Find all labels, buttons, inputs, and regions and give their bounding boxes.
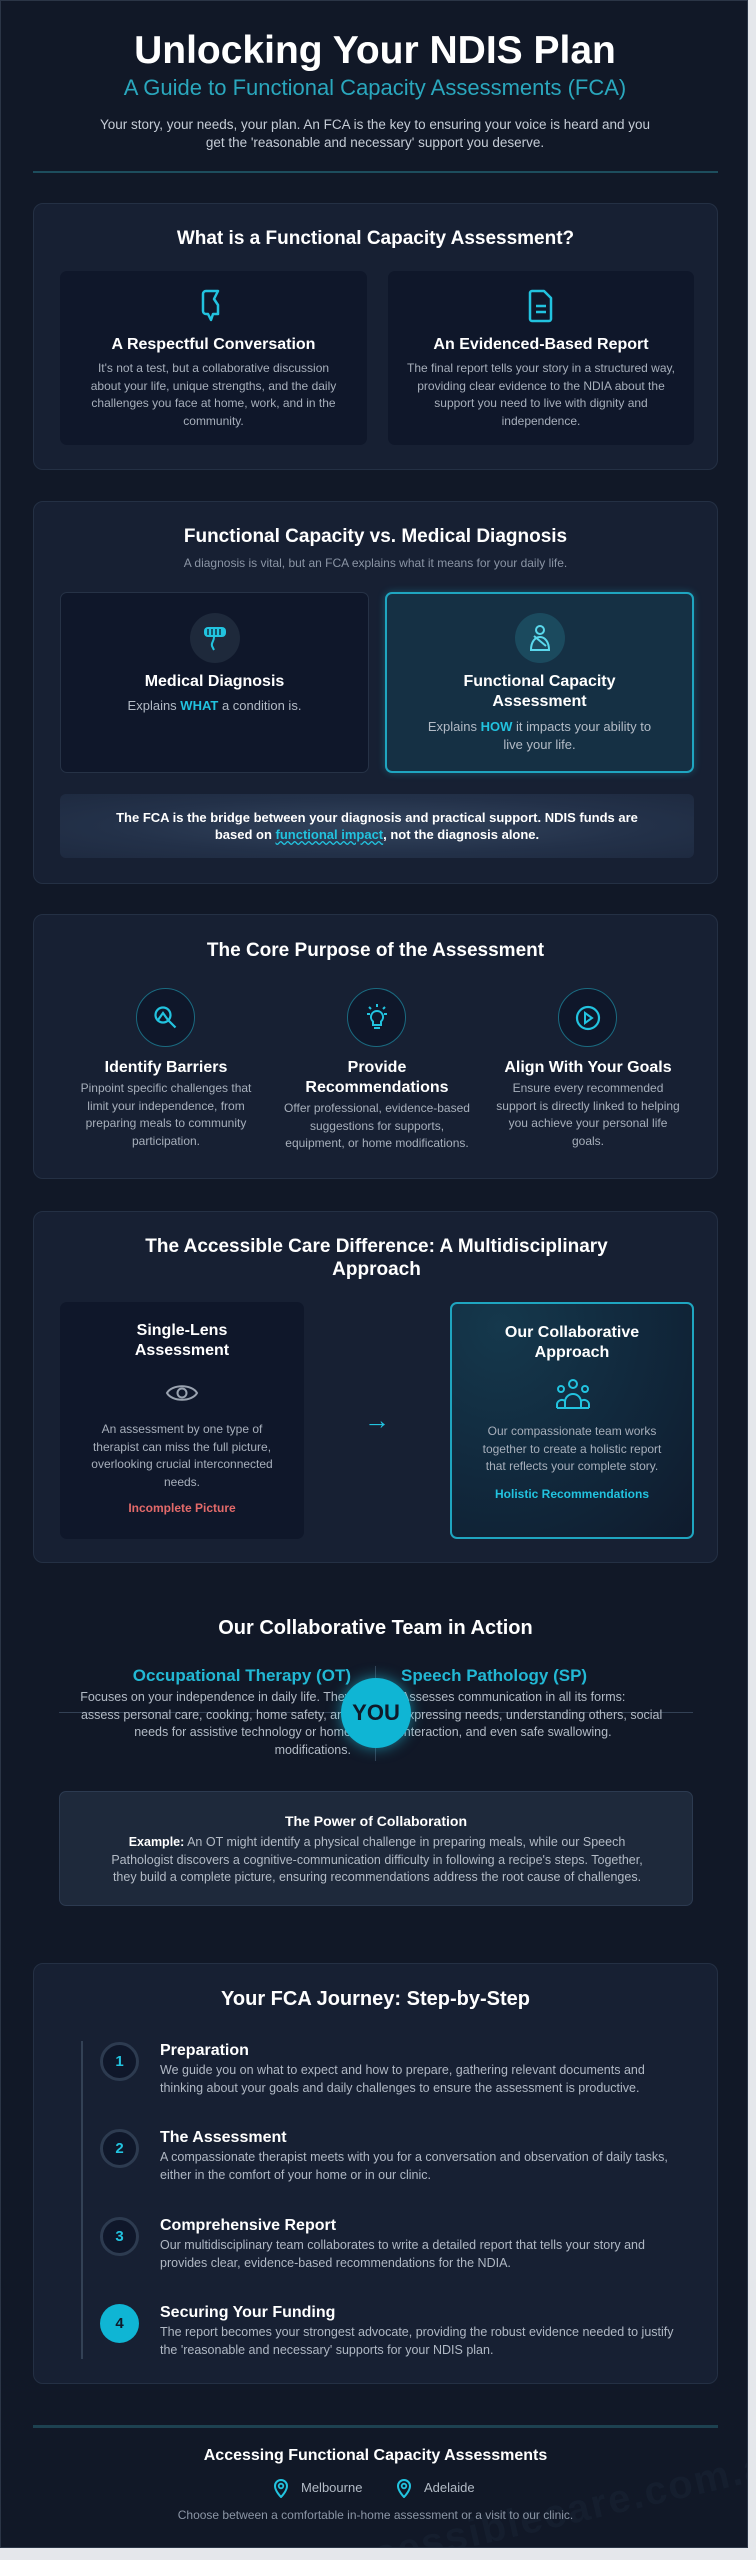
card: collaborative bbox=[450, 1302, 694, 1539]
card: functional capacity assessment: Functional Capacity bbox=[463, 673, 616, 690]
step 3: 3 bbox=[115, 2228, 124, 2245]
card: respectful conversation bbox=[60, 271, 367, 445]
item: align goals: Align With Your Goals bbox=[504, 1059, 672, 1076]
step 4: Securing Your Funding bbox=[160, 2304, 335, 2321]
icon: search bbox=[136, 988, 195, 1047]
card: single lens: Single-Lens bbox=[137, 1322, 227, 1339]
item: recommendations: Provide bbox=[348, 1059, 406, 1076]
card: evidence report bbox=[388, 271, 694, 445]
SP column: Assesses communication in all its forms: bbox=[401, 1690, 625, 1704]
icon: bulb bbox=[347, 988, 406, 1047]
card: collaborative: Holistic Recommendations bbox=[495, 1487, 649, 1501]
icon: eye bbox=[166, 1385, 198, 1401]
card: medical diagnosis bbox=[60, 592, 369, 773]
section: team in action bbox=[59, 1617, 693, 1906]
item: recommendations: Recommendations bbox=[305, 1079, 449, 1096]
icon: play target bbox=[558, 988, 617, 1047]
item: identify barriers: Identify Barriers bbox=[105, 1059, 227, 1076]
panel: FCA vs diagnosis bbox=[33, 501, 718, 884]
step 1: 1 bbox=[115, 2053, 124, 2070]
step 3: Comprehensive Report bbox=[160, 2217, 336, 2234]
item: recommendations bbox=[284, 988, 470, 1150]
card: single lens: Assessment bbox=[135, 1342, 229, 1359]
title: Unlocking Your NDIS Plan bbox=[134, 29, 616, 72]
OT column: Occupational Therapy (OT) bbox=[133, 1666, 351, 1685]
card: functional capacity assessment bbox=[385, 592, 694, 773]
icon: person bbox=[515, 613, 565, 663]
item: recommendations: Offer professional, evidence-based suggestions for supports, bbox=[284, 1101, 470, 1132]
card: collaborative: Our compassionate team works together to create a holistic report that reflects your complete story. bbox=[483, 1424, 661, 1473]
panel: journey bbox=[33, 1963, 718, 2384]
step 1 bbox=[100, 2042, 645, 2094]
YOU circle bbox=[341, 1678, 411, 1748]
card: evidence report: An Evidenced-Based Report bbox=[433, 336, 649, 353]
SP column: Speech Pathology (SP) bbox=[401, 1666, 587, 1685]
footer heading: Accessing Functional Capacity Assessments bbox=[204, 2447, 547, 2464]
card: single lens: An assessment by one type of therapist can miss the full picture, overlooking crucial interconnected needs. bbox=[91, 1422, 273, 1488]
YOU circle: YOU bbox=[352, 1700, 400, 1725]
step 2: The Assessment bbox=[160, 2129, 287, 2146]
heading: What is a Functional Capacity Assessment? bbox=[177, 228, 574, 249]
intro text: Your story, your needs, your plan. An FCA is the key to ensuring your voice is heard and you get the 'reasonable and necessary' support you deserve. bbox=[100, 117, 650, 150]
callout: power of collaboration: Example: An OT might identify a physical challenge in preparing meals, while our Speech bbox=[129, 1835, 625, 1849]
card: functional capacity assessment: Explains HOW it impacts your ability to live your life. bbox=[428, 719, 651, 752]
icon: document bbox=[528, 290, 552, 322]
callout: bridge banner bbox=[60, 794, 694, 858]
icon: team bbox=[556, 1379, 590, 1409]
OT column: modifications. bbox=[275, 1742, 351, 1756]
item: identify barriers bbox=[81, 988, 252, 1148]
panel: multidisciplinary approach bbox=[33, 1211, 718, 1563]
heading: Functional Capacity vs. Medical Diagnosis bbox=[184, 526, 567, 547]
step 4: The report becomes your strongest advocate, providing the robust evidence needed to justify bbox=[160, 2325, 674, 2339]
heading: The Core Purpose of the Assessment bbox=[207, 940, 544, 961]
card: functional capacity assessment: Assessment bbox=[492, 693, 587, 710]
panel: FCA vs diagnosis: A diagnosis is vital, but an FCA explains what it means for your daily life. bbox=[184, 556, 567, 570]
OT column: assess personal care, cooking, home safety, and bbox=[81, 1708, 351, 1722]
step 4 bbox=[100, 2304, 674, 2356]
panel: core purpose bbox=[33, 914, 718, 1179]
callout: bridge banner: The FCA is the bridge between your diagnosis and practical support. NDIS funds are bbox=[116, 810, 638, 825]
step 4: the 'reasonable and necessary' supports for your NDIS plan. bbox=[160, 2342, 493, 2356]
step 2: 2 bbox=[115, 2140, 124, 2157]
locations: Adelaide bbox=[424, 2480, 475, 2495]
step 2: A compassionate therapist meets with you for a conversation and observation of daily tasks, either in the comfort of your home or in our clinic. bbox=[160, 2150, 668, 2182]
card: evidence report: The final report tells your story in a structured way, providing clear evidence to the NDIA about the support you need to live with dignity and independence. bbox=[407, 361, 675, 428]
SP column: interaction, and even safe swallowing. bbox=[401, 1725, 612, 1739]
step 3 bbox=[100, 2217, 645, 2270]
item: align goals: Ensure every recommended support is directly linked to helping you achieve your personal life goals. bbox=[496, 1081, 680, 1148]
locations bbox=[274, 2479, 475, 2498]
card: collaborative: Approach bbox=[535, 1344, 609, 1361]
step 3: Our multidisciplinary team collaborates to write a detailed report that tells your story and provides clear, evidence-based recommendations for the NDIA. bbox=[160, 2238, 645, 2270]
callout: power of collaboration: The Power of Collaboration bbox=[285, 1813, 467, 1829]
icon: chat bbox=[202, 290, 220, 322]
caption: Choose between a comfortable in-home assessment or a visit to our clinic. bbox=[178, 2508, 573, 2522]
locations: Melbourne bbox=[301, 2480, 362, 2495]
OT column bbox=[80, 1666, 351, 1756]
card: medical diagnosis: Medical Diagnosis bbox=[145, 673, 284, 690]
icon: stethoscope bbox=[190, 613, 240, 663]
OT column: Focuses on your independence in daily life. They bbox=[80, 1690, 351, 1704]
card: medical diagnosis: Explains WHAT a condition is. bbox=[128, 698, 301, 713]
card: respectful conversation: A Respectful Conversation bbox=[112, 336, 315, 353]
subtitle: A Guide to Functional Capacity Assessments (FCA) bbox=[124, 75, 626, 100]
footer bbox=[178, 2447, 573, 2522]
step 4: 4 bbox=[115, 2315, 124, 2332]
callout: power of collaboration bbox=[59, 1791, 693, 1906]
item: identify barriers: Pinpoint specific challenges that limit your independence, from preparing meals to community participation. bbox=[81, 1081, 251, 1148]
step 2 bbox=[100, 2129, 668, 2182]
SP column bbox=[401, 1666, 662, 1739]
card: collaborative: Our Collaborative bbox=[505, 1324, 639, 1341]
callout: power of collaboration: Pathologist discovers a cognitive-communication difficulty in following a recipe's steps. Together, they build a complete picture, ensuring recommendations address the root cause of challenges. bbox=[111, 1852, 643, 1884]
heading: The Accessible Care Difference: A Multidisciplinary Approach bbox=[145, 1236, 608, 1280]
panel: what is FCA bbox=[33, 203, 718, 470]
arrow: → bbox=[364, 1405, 390, 1435]
item: align goals bbox=[496, 988, 680, 1148]
heading: Your FCA Journey: Step-by-Step bbox=[221, 1988, 530, 2010]
step 1: Preparation bbox=[160, 2042, 249, 2059]
OT column: needs for assistive technology or home bbox=[134, 1725, 351, 1739]
SP column: expressing needs, understanding others, social bbox=[401, 1708, 662, 1722]
card: single lens: Incomplete Picture bbox=[128, 1501, 236, 1515]
callout: bridge banner: based on functional impact, not the diagnosis alone. bbox=[215, 827, 539, 842]
heading: Our Collaborative Team in Action bbox=[218, 1617, 533, 1639]
step 1: We guide you on what to expect and how to prepare, gathering relevant documents and thinking about your goals and daily challenges to ensure the assessment is productive. bbox=[160, 2063, 645, 2094]
card: respectful conversation: It's not a test, but a collaborative discussion about your life, unique strengths, and the daily challenges you face at home, work, and in the community. bbox=[91, 361, 336, 428]
item: recommendations: equipment, or home modifications. bbox=[285, 1136, 469, 1150]
card: single lens bbox=[60, 1302, 304, 1539]
